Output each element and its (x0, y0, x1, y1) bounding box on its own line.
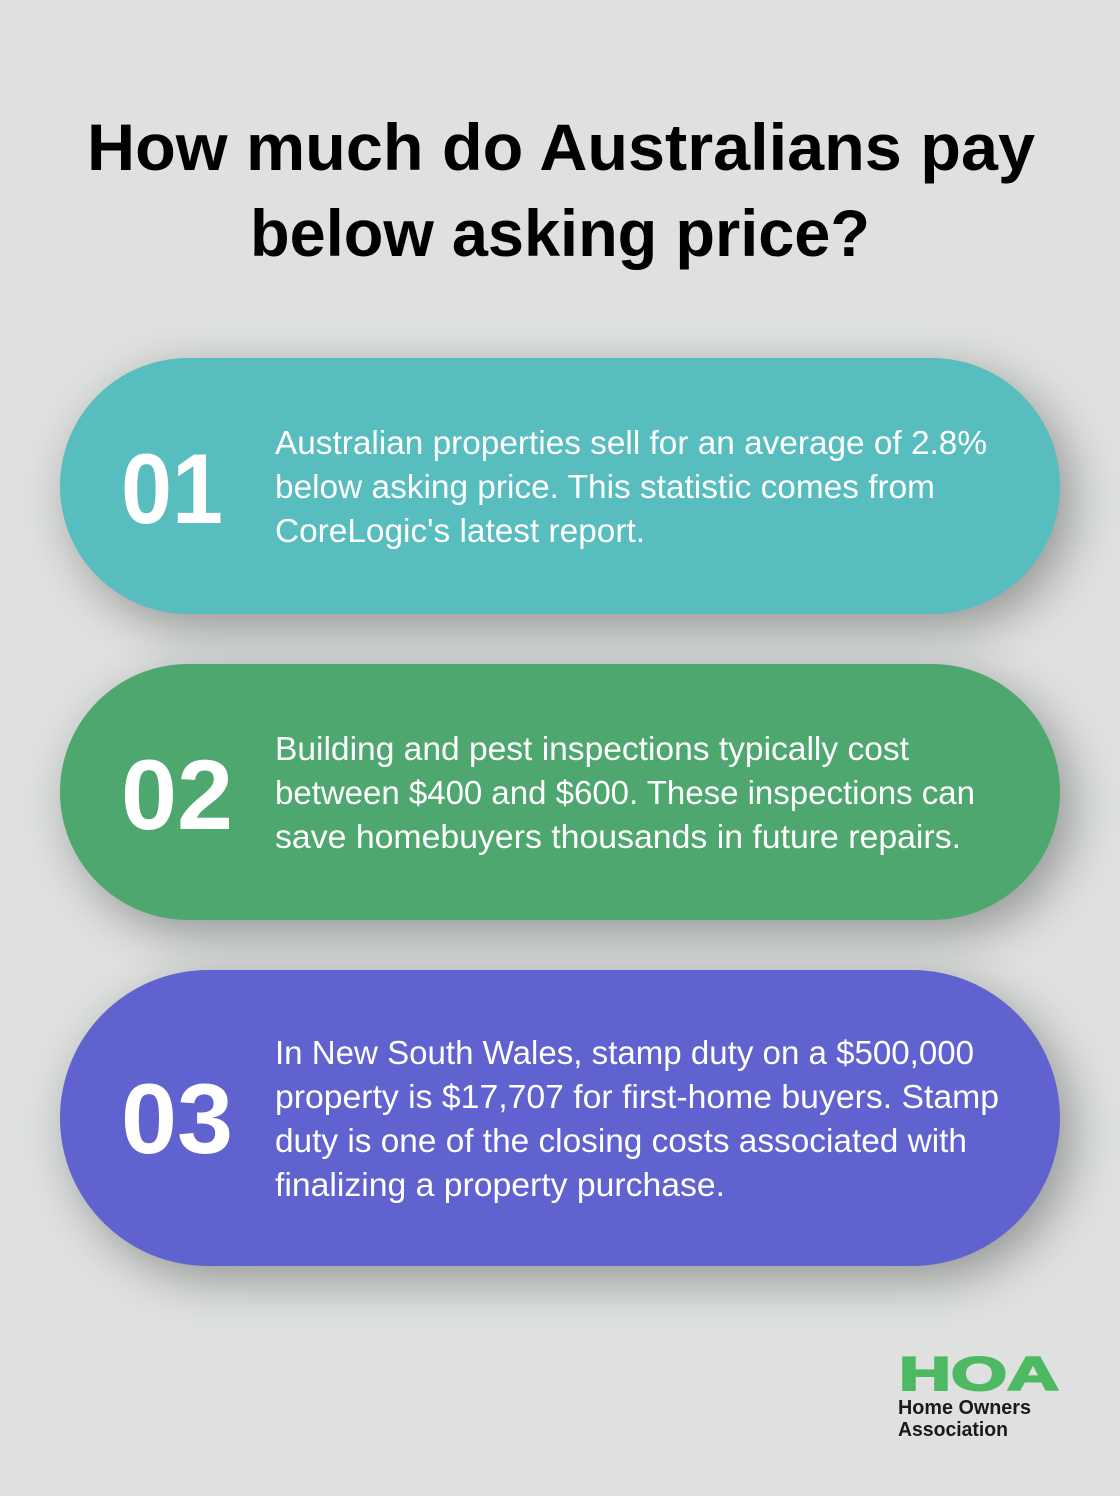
text: step 02 description: between $400 and $600. These inspections can (275, 774, 975, 811)
logo: Home Owners Association: Association (898, 1419, 1008, 1441)
text: step 01 description: CoreLogic's latest report. (275, 512, 645, 549)
title: How much do Australians pay (87, 110, 1035, 184)
text: step 03 description: In New South Wales, stamp duty on a $500,000 (275, 1034, 974, 1071)
text: step 01 description (275, 424, 987, 549)
text: step 02 description: save homebuyers thousands in future repairs. (275, 818, 961, 855)
text: step 01 description: Australian properties sell for an average of 2.8% (275, 424, 987, 461)
text: step 02 description (275, 730, 975, 855)
logo: Home Owners Association: HOA (899, 1347, 1059, 1400)
logo: Home Owners Association (898, 1347, 1059, 1441)
title (87, 110, 1035, 270)
number 02: 02 (121, 739, 233, 850)
panel: step 01 (60, 358, 1072, 628)
panel: step 03 (60, 970, 1072, 1280)
logo: Home Owners Association: Home Owners (898, 1397, 1031, 1419)
text: step 03 description: finalizing a property purchase. (275, 1166, 725, 1203)
number 01: 01 (121, 433, 223, 544)
panel: step 02 (60, 664, 1072, 934)
number 03: 03 (121, 1063, 233, 1174)
text: step 03 description: property is $17,707 for first-home buyers. Stamp (275, 1078, 999, 1115)
title: below asking price? (250, 196, 870, 270)
text: step 01 description: below asking price. This statistic comes from (275, 468, 935, 505)
text: step 03 description: duty is one of the closing costs associated with (275, 1122, 967, 1159)
text: step 03 description (275, 1034, 999, 1203)
text: step 02 description: Building and pest inspections typically cost (275, 730, 909, 767)
